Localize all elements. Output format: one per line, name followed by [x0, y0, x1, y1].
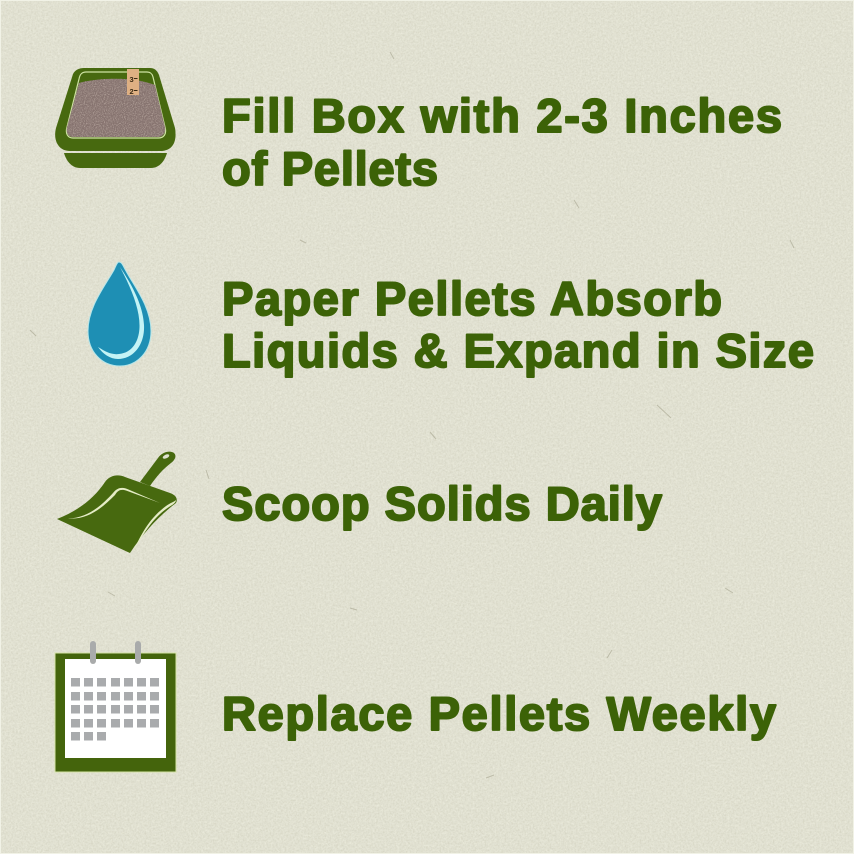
calendar rings: [90, 641, 141, 664]
litter box inner outline: [66, 72, 166, 138]
water drop highlight: [98, 267, 144, 359]
icon: water drop: [88, 262, 151, 366]
heading: fill box: Fill Box with 2-3 Inches: [222, 89, 782, 142]
heading: fill box: of Pellets: [222, 142, 438, 195]
icon: calendar: [55, 641, 176, 772]
litter box rim: [55, 68, 176, 151]
heading: absorb: Paper Pellets Absorb: [222, 272, 722, 325]
icon: dustpan: [57, 452, 177, 553]
dustpan body: [57, 475, 177, 553]
calendar days: [71, 678, 159, 740]
icon: litter box with pellets: [55, 68, 176, 168]
heading: absorb: Liquids & Expand in Size: [222, 324, 814, 377]
heading: absorb: [222, 272, 814, 377]
dustpan top highlight: [68, 488, 160, 519]
calendar page: [65, 659, 166, 758]
pellets fill: [67, 79, 165, 137]
litter box base: [64, 153, 167, 168]
heading: fill box: [222, 89, 782, 195]
heading: scoop: Scoop Solids Daily: [222, 477, 662, 530]
heading: replace: Replace Pellets Weekly: [222, 687, 776, 740]
dustpan edge highlight: [133, 500, 176, 552]
depth ruler: 3: [130, 75, 134, 84]
calendar frame: [55, 653, 176, 772]
depth ruler: 2: [130, 87, 134, 96]
dustpan handle: [140, 452, 175, 486]
depth ruler: [127, 69, 139, 96]
